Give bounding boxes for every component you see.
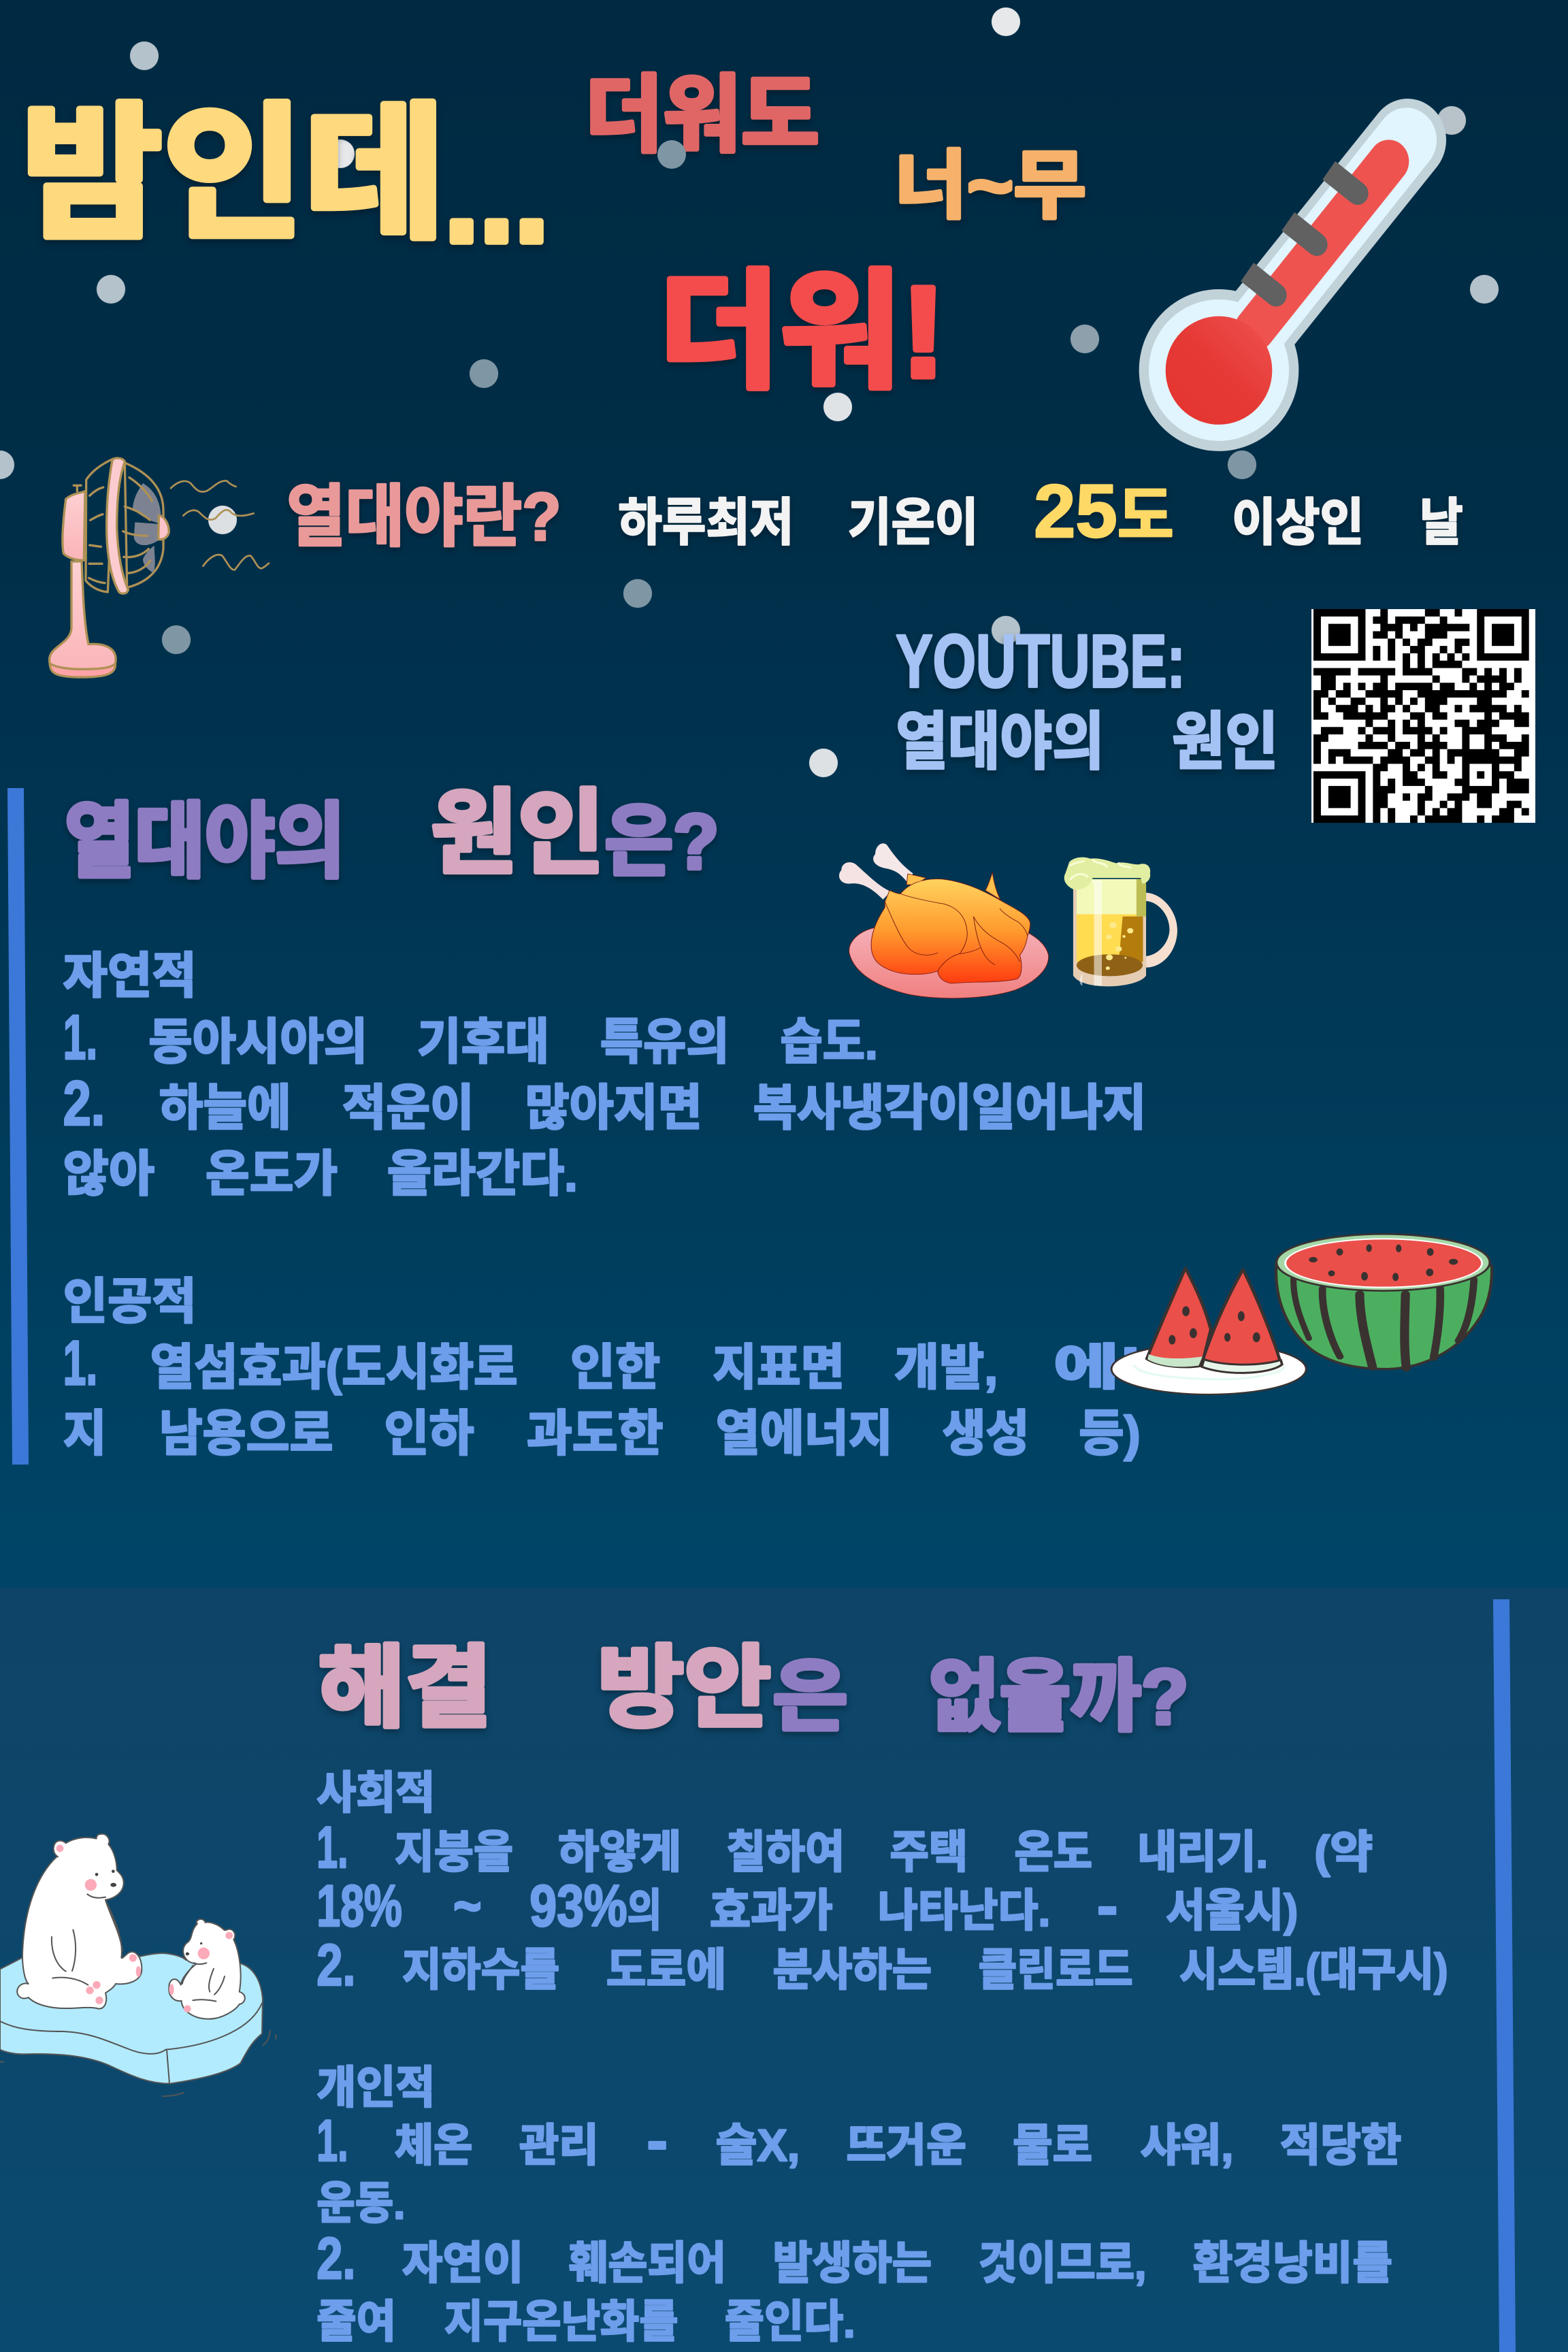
- icon: electric fan: [50, 458, 269, 677]
- solution line 4: 적당한: [1280, 2121, 1401, 2171]
- section heading: 해결 방안은 없을까?: [318, 1638, 1188, 1741]
- cause line 5: [63, 1406, 1141, 1461]
- solution line 4: 물로: [1013, 2121, 1092, 2171]
- cause line 5: 남용으로: [159, 1406, 333, 1461]
- solution line 4: 샤워,: [1141, 2121, 1233, 2171]
- cause line 5: 인하: [384, 1406, 474, 1461]
- section heading: 해결 방안은 없을까?: 은: [772, 1654, 848, 1741]
- section heading: 해결 방안은 없을까?: 방안: [598, 1638, 771, 1739]
- solution line 1: 1.: [316, 1815, 348, 1880]
- ice floe: [0, 1953, 276, 2096]
- youtube label: [896, 619, 1278, 777]
- youtube label: YOUTUBE:: [896, 619, 1186, 703]
- cause line 3: [63, 1147, 578, 1202]
- solution line 4: 관리: [519, 2121, 599, 2171]
- solution line 2: -: [1097, 1874, 1118, 1939]
- solution line 5: 운동.: [316, 2178, 405, 2229]
- cause line 1: 기후대: [417, 1015, 549, 1070]
- solution line 6: 2.: [316, 2226, 356, 2291]
- solution line 6: 발생하는: [772, 2238, 932, 2289]
- solution line 6: 환경낭비를: [1193, 2238, 1392, 2289]
- definition words: 날: [1420, 493, 1463, 551]
- solution line 1: 온도: [1014, 1827, 1092, 1878]
- QR code: [1311, 609, 1535, 823]
- background: [0, 0, 1568, 1588]
- cause line 5: 지: [63, 1406, 107, 1461]
- solution line 1: (약: [1314, 1827, 1373, 1878]
- cause line 4: 개발,: [894, 1340, 998, 1395]
- solution line 6: [316, 2226, 1392, 2291]
- cause line 2: 많아지면: [525, 1081, 702, 1136]
- subheading: 개인적: 개인적: [316, 2063, 435, 2113]
- dot over heading: [657, 140, 686, 169]
- title: 밤인데...: 밤인데: [21, 92, 446, 257]
- icon: polar bears on ice floe: [0, 1834, 276, 2096]
- cause line 2: 하늘에: [159, 1081, 291, 1136]
- heading: 너~무: 너~무: [894, 144, 1086, 228]
- youtube label: 열대야의: [896, 706, 1105, 777]
- cause line 1: 1.: [63, 1002, 97, 1073]
- section heading: 열대야의 원인은?: 열대야의: [65, 795, 345, 887]
- solution line 3: 클린로드: [979, 1945, 1133, 1995]
- snow dots: [0, 7, 1499, 777]
- solution line 1: [316, 1815, 1373, 1880]
- definition words: 기온이: [848, 493, 979, 551]
- cause line 2: 적운이: [342, 1081, 474, 1136]
- solution line 3: 지하수를: [402, 1945, 559, 1995]
- left accent bar: [7, 788, 29, 1465]
- cause line 4: 지표면: [713, 1340, 845, 1395]
- solution line 2: 나타난다.: [878, 1886, 1050, 1936]
- headline texts: [21, 69, 1463, 1741]
- right accent bar: [1493, 1599, 1516, 2352]
- solution line 4: 1.: [316, 2108, 348, 2174]
- definition words: 이상인: [1232, 493, 1364, 551]
- cause line 1: 습도.: [780, 1015, 878, 1070]
- small bear: [169, 1919, 245, 2019]
- solution line 2: 18%: [316, 1874, 402, 1939]
- cause line 3: 온도가: [206, 1147, 338, 1202]
- definition line: [287, 470, 1463, 555]
- solution line 7: 줄인다.: [725, 2297, 855, 2347]
- cause line 4: 열섬효과(도시화로: [150, 1340, 518, 1395]
- youtube label: 원인: [1172, 706, 1278, 777]
- solution line 2: 서울시): [1166, 1886, 1298, 1936]
- cause line 1: [63, 1002, 878, 1073]
- solution line 3: 시스템.(대구시): [1179, 1945, 1448, 1995]
- cause line 5: 등): [1079, 1406, 1141, 1461]
- solution line 7: 줄여: [316, 2297, 396, 2347]
- cause line 3: 올라간다.: [387, 1147, 578, 1202]
- solution line 2: 효과가: [710, 1886, 833, 1936]
- solution line 7: 지구온난화를: [444, 2297, 679, 2347]
- causes body text: [63, 949, 1186, 1461]
- section heading: 해결 방안은 없을까?: 해결: [318, 1638, 492, 1739]
- solution line 2: 93%의: [529, 1874, 662, 1939]
- cause line 4: [63, 1327, 1186, 1398]
- icon: roast chicken on plate: [839, 843, 1049, 998]
- solution line 1: 칠하여: [726, 1827, 845, 1878]
- section heading: 해결 방안은 없을까?: 없을까?: [929, 1654, 1188, 1741]
- big bear: [17, 1834, 142, 2009]
- cause line 5: 과도한: [527, 1406, 664, 1461]
- solution line 1: 주택: [889, 1827, 968, 1878]
- solution line 6: 훼손되어: [569, 2238, 726, 2289]
- solution line 4: 술X,: [716, 2121, 800, 2171]
- solution line 2: [316, 1874, 1298, 1939]
- heading: 더워도: 더워도: [585, 69, 819, 163]
- cause line 3: 않아: [63, 1147, 154, 1202]
- solutions body text: [316, 1768, 1448, 2347]
- section heading: 열대야의 원인은?: 은?: [605, 798, 719, 885]
- solution line 3: [316, 1933, 1448, 1998]
- cause line 2: 2.: [63, 1068, 105, 1139]
- solution line 6: 자연이: [402, 2238, 523, 2289]
- subheading: 자연적: 자연적: [63, 949, 197, 1004]
- cause line 1: 동아시아의: [148, 1015, 368, 1070]
- cause line 4: 1.: [63, 1327, 97, 1398]
- icon: watermelon: [1111, 1234, 1492, 1394]
- solution line 6: 것이므로,: [979, 2238, 1146, 2289]
- solution line 7: [316, 2297, 855, 2347]
- section heading: 열대야의 원인은?: 원인: [431, 781, 605, 885]
- cause line 4: 에너: [1054, 1340, 1186, 1395]
- solution line 3: 도로에: [606, 1945, 726, 1995]
- definition words: 25도: [1034, 470, 1174, 553]
- cause line 2: 복사냉각이일어나지: [753, 1081, 1146, 1136]
- cause line 4: 인한: [570, 1340, 660, 1395]
- cause line 1: 특유의: [600, 1015, 730, 1070]
- solution line 3: 분사하는: [772, 1945, 932, 1995]
- cause line 5: 생성: [943, 1406, 1029, 1461]
- definition words: [618, 470, 1463, 553]
- solution line 4: -: [647, 2108, 668, 2174]
- solution line 3: 2.: [316, 1933, 356, 1998]
- definition words: 하루최저: [618, 493, 794, 551]
- heading: 더워!: 더워!: [659, 260, 945, 404]
- subheading: 사회적: 사회적: [316, 1768, 435, 1818]
- solution line 1: 지붕을: [395, 1827, 513, 1878]
- title: 밤인데...: ...: [444, 120, 549, 271]
- lower panel background: [0, 1588, 1568, 2352]
- label: 열대야란?: 열대야란?: [287, 479, 561, 555]
- cause line 2: [63, 1068, 1146, 1139]
- solution line 4: 체온: [395, 2121, 473, 2171]
- solution line 1: 내리기.: [1137, 1827, 1268, 1878]
- cause line 5: 열에너지: [716, 1406, 893, 1461]
- icon: beer mug: [1064, 858, 1177, 986]
- solution line 1: 하얗게: [558, 1827, 681, 1878]
- solution line 2: ~: [453, 1874, 482, 1939]
- section heading: 열대야의 원인은?: [65, 781, 719, 887]
- icon: thermometer: [1139, 140, 1407, 451]
- solution line 4: 뜨거운: [847, 2121, 966, 2171]
- subheading: 인공적: 인공적: [63, 1274, 197, 1329]
- solution line 4: [316, 2108, 1401, 2174]
